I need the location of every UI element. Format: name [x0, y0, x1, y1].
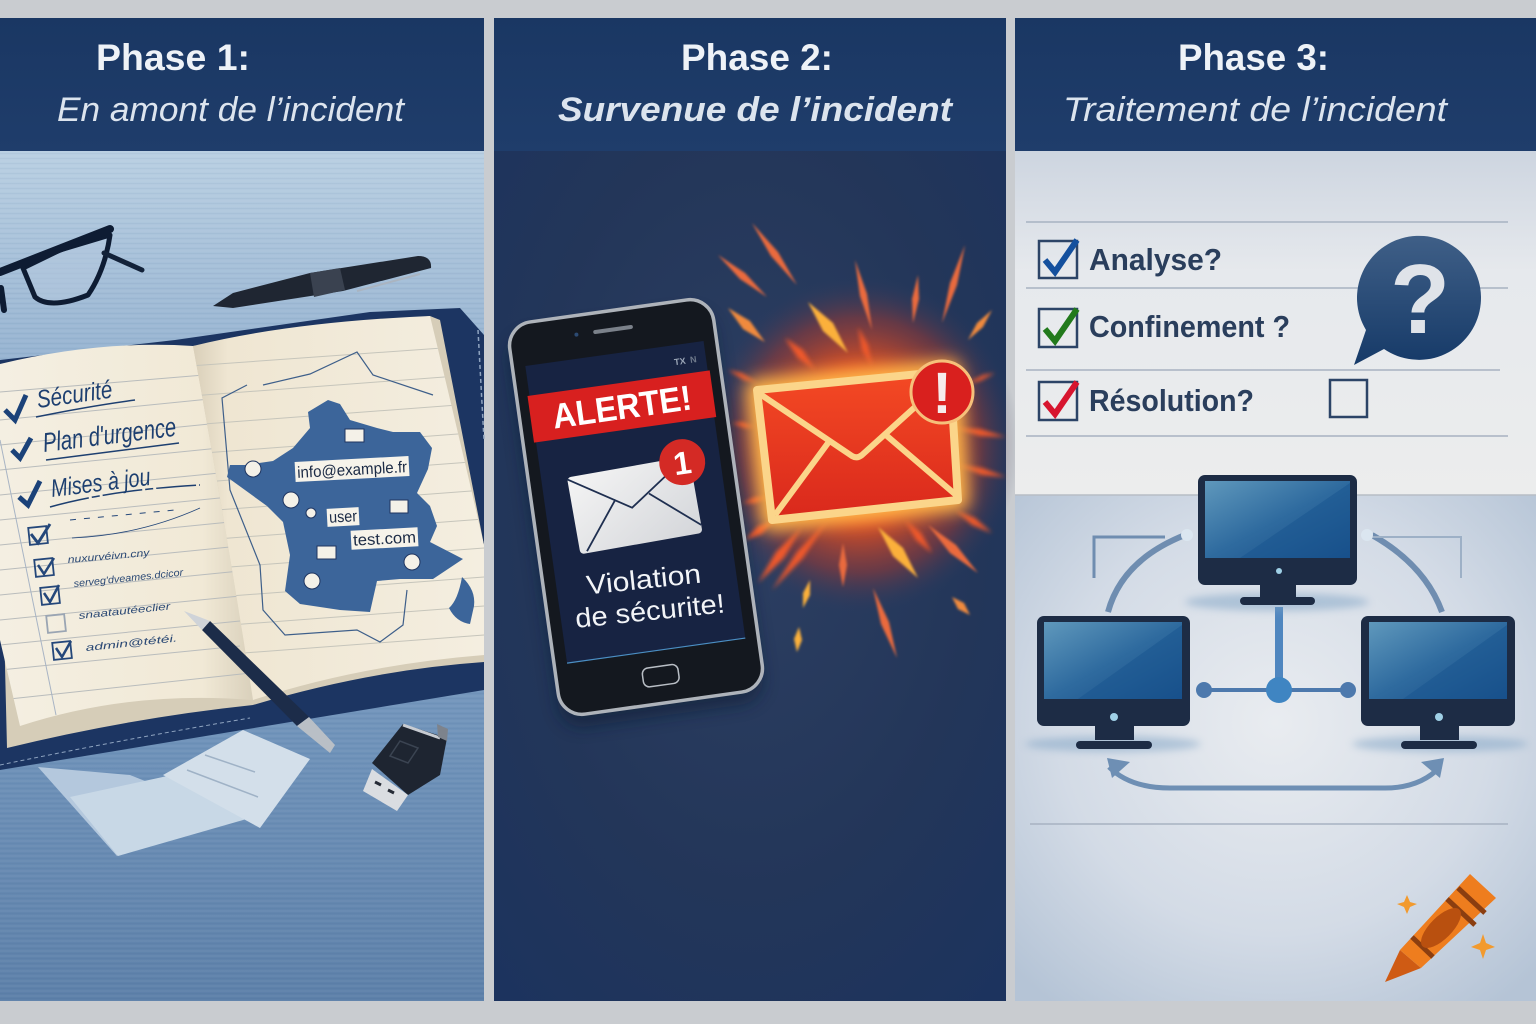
map email labels: info@example.fr: [297, 459, 408, 482]
icon: glasses: [0, 229, 142, 310]
scribbled email addresses: admin@tétéi.: [85, 633, 178, 654]
header: phase 3: [1015, 18, 1536, 151]
phone shadow: [507, 309, 766, 730]
header: phase 1: [0, 18, 484, 151]
phone body: [506, 297, 766, 717]
violation message: Violation: [585, 559, 702, 601]
header: phase 2: Phase 2:: [681, 37, 833, 78]
scribbled email addresses: snaatautéeclier: [78, 601, 172, 622]
header: phase 3: Traitement de l’incident: [1063, 91, 1449, 129]
alert badge: !: [932, 361, 952, 426]
checklist: [1039, 240, 1367, 420]
map email labels: user: [329, 508, 358, 527]
panel: phase 2: [494, 151, 1020, 1001]
empty checkbox: [1330, 380, 1367, 417]
handwritten list: [5, 376, 200, 507]
handwritten list: Sécurité: [35, 376, 114, 414]
panel 3 upper background: [1015, 151, 1536, 496]
right page: [190, 316, 484, 700]
icon: top monitor: [1185, 475, 1369, 611]
notification badge: 1: [671, 444, 694, 482]
icon: pen on desk: [213, 256, 431, 308]
violation message: de sécurite!: [574, 588, 726, 634]
home button: [642, 664, 680, 688]
page block: [0, 316, 484, 748]
icon: pen on notebook: [184, 611, 335, 753]
icon: explosion burst: [700, 223, 1020, 658]
header: phase 1: Phase 1:: [96, 37, 250, 78]
soft inner rays: [728, 327, 1006, 590]
checklist item: Confinement: [1039, 309, 1290, 347]
map email labels: [295, 456, 418, 550]
alert badge: [911, 361, 973, 426]
white envelope: [567, 456, 703, 554]
alert banner: ALERTE!: [550, 378, 694, 437]
phone screen: [525, 341, 745, 663]
panel: phase 3: [1015, 151, 1536, 1001]
scribbled email addresses: [67, 548, 184, 654]
header: phase 1: En amont de l’incident: [57, 91, 406, 129]
map email labels: test.com: [353, 529, 416, 550]
icon: phone: [506, 297, 766, 717]
icon: left monitor: [1025, 616, 1201, 752]
handwritten list: Plan d'urgence: [41, 412, 178, 458]
burst glow: [700, 275, 1020, 615]
panel 1 desk background: [0, 151, 484, 1001]
checklist item: Analyse: [1039, 240, 1222, 278]
map envelope markers: [245, 429, 420, 589]
alert banner: [527, 370, 716, 443]
phone screen: N: [689, 354, 697, 365]
icon: red alert envelope: [757, 361, 973, 520]
checkbox rows: [28, 508, 200, 660]
header: phase 2: Survenue de l’incident: [558, 91, 954, 129]
map of France: [227, 400, 474, 624]
panel 2 background: [494, 151, 1006, 1001]
map outline: [222, 352, 433, 642]
left page: [0, 345, 260, 726]
icon: notebook: [0, 308, 484, 770]
papers on desk: [38, 730, 310, 856]
panel: phase 1: [0, 151, 484, 1001]
checklist item: Confinement: Confinement ?: [1089, 309, 1290, 344]
scribbled email addresses: serveg'dveames.dcicor: [73, 567, 184, 590]
icon: question speech bubble: ?: [1390, 244, 1450, 354]
header: phase 3: Phase 3:: [1178, 37, 1329, 78]
icon: right monitor: [1352, 616, 1528, 752]
header: phase 2: [494, 18, 1006, 151]
checklist item: Analyse: Analyse?: [1089, 242, 1222, 277]
notification badge: [656, 436, 708, 488]
handwritten list: Mises à jou: [49, 463, 152, 503]
notebook cover: [0, 308, 484, 770]
panel 3 lower background: [1015, 495, 1536, 1001]
network connectors: [1094, 529, 1461, 788]
icon: question speech bubble: [1354, 236, 1481, 365]
checklist item: Résolution: Résolution?: [1089, 383, 1254, 418]
burst rays: [718, 223, 992, 658]
scribbled email addresses: nuxurvéivn.cny: [67, 548, 151, 566]
icon: USB key: [363, 724, 448, 811]
phone screen: TX: [674, 356, 686, 367]
icon: crayon logo: [1385, 874, 1496, 982]
checklist item: Résolution: [1039, 382, 1254, 420]
